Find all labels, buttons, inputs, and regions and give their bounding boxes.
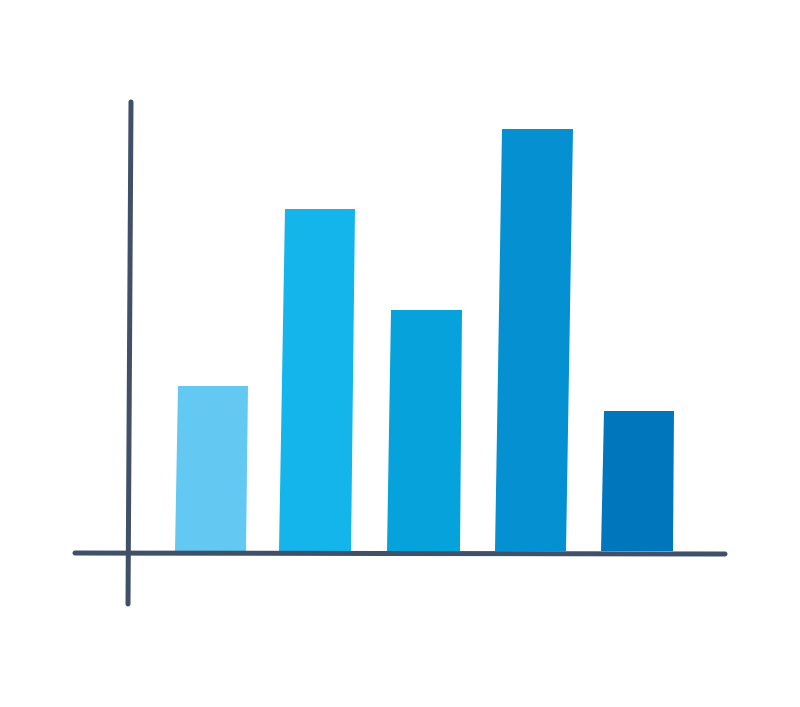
bar 3 (387, 310, 462, 551)
bar 1 (175, 386, 248, 551)
axis: x (75, 553, 725, 554)
axis: y (128, 102, 131, 604)
bar 4 (495, 129, 573, 551)
bar 5 (601, 411, 674, 551)
bar 2 (279, 209, 355, 551)
